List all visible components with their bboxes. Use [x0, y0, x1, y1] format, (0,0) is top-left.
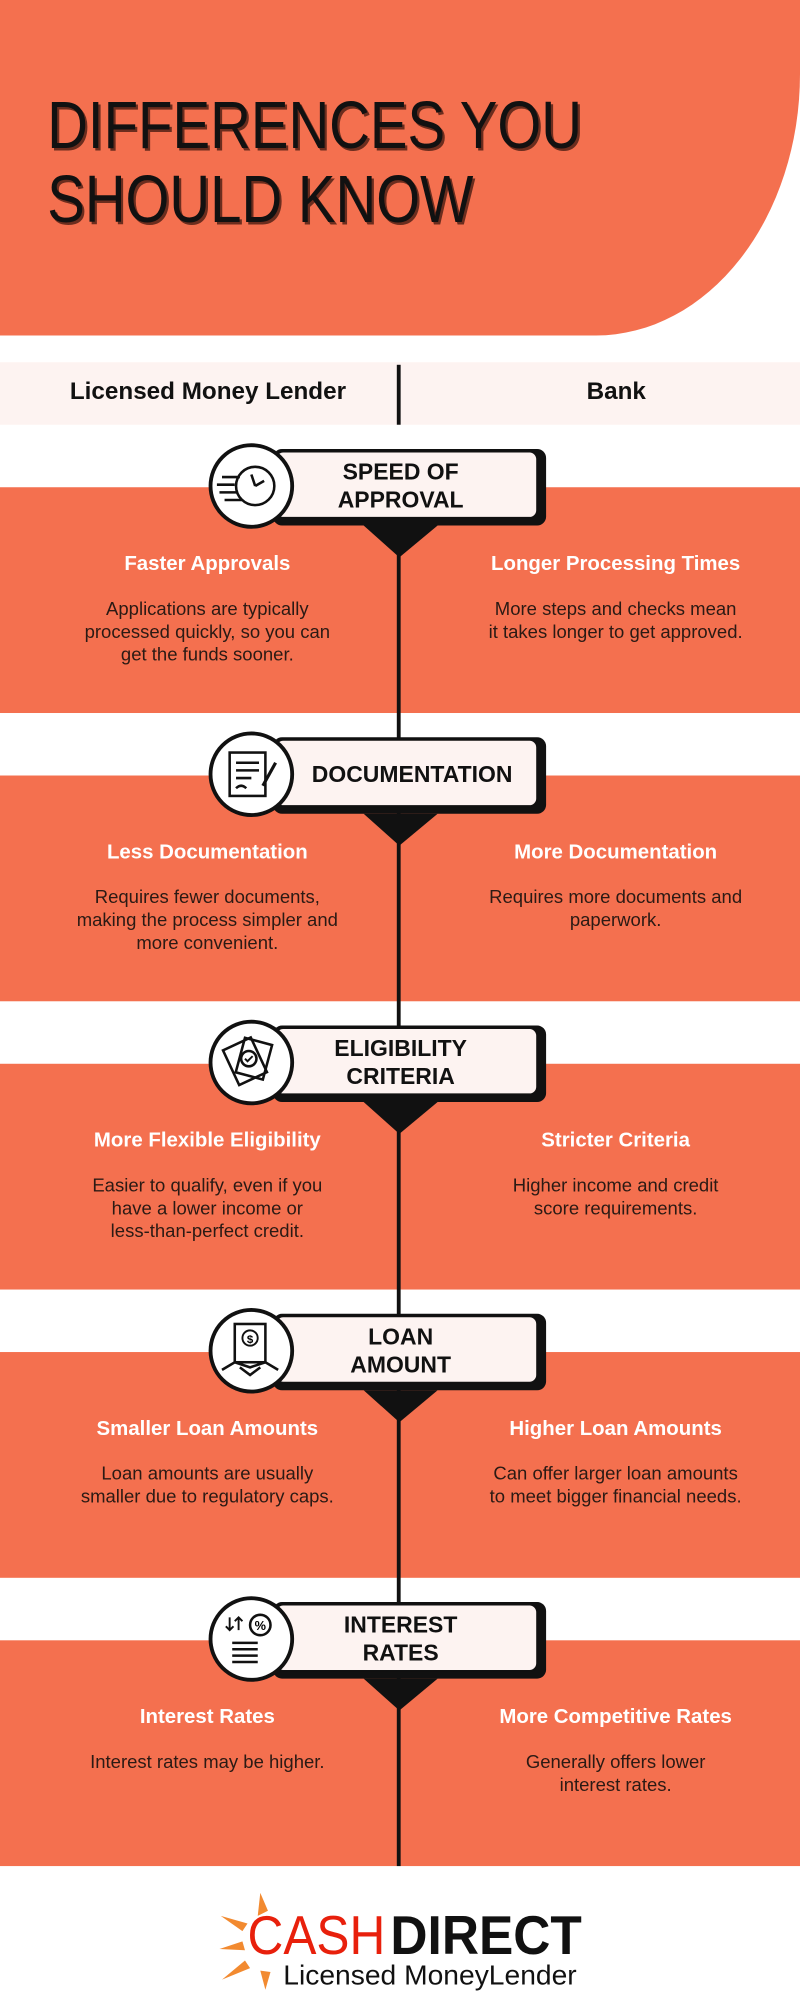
section 3: eligibility criteria: have a lower income or: [112, 1199, 303, 1219]
right: longer processing times: Longer Processing Times: [491, 554, 740, 575]
badge: loan amount: LOAN: [368, 1323, 433, 1349]
center timeline line: [397, 485, 401, 1866]
badge: eligibility criteria: [208, 1020, 546, 1133]
section 4: loan amount: Can offer larger loan amounts: [493, 1464, 738, 1485]
section 3: eligibility criteria: Easier to qualify, even if you: [92, 1176, 322, 1196]
title: DIFFERENCES YOU: [47, 89, 582, 163]
icon: document with handshake: [211, 1310, 292, 1392]
icon: coins with percent: %: [255, 1618, 266, 1633]
right: higher loan amounts: Higher Loan Amounts: [509, 1418, 722, 1440]
badge: interest rates: [208, 1596, 546, 1710]
section 1: speed of approval: get the funds sooner.: [121, 645, 294, 666]
section 2: documentation: more convenient.: [136, 934, 278, 954]
badge: interest rates: INTEREST: [344, 1612, 457, 1638]
section 1: speed of approval: Applications are typically: [106, 599, 309, 620]
left: interest rates: Interest Rates: [140, 1707, 275, 1728]
icon: checked papers: [211, 1022, 292, 1103]
badge: documentation: [208, 732, 546, 845]
section 1: speed of approval: it takes longer to get approved.: [489, 622, 743, 643]
section 2: documentation: paperwork.: [570, 911, 661, 931]
section 2: documentation: making the process simpler and: [77, 911, 338, 931]
header background: [0, 0, 800, 335]
section 5: interest rates: Interest rates may be higher.: [90, 1753, 325, 1773]
badge: speed of approval: SPEED OF: [343, 459, 459, 485]
right: stricter criteria: Stricter Criteria: [541, 1130, 690, 1152]
header: licensed money lender: Licensed Money Lender: [70, 379, 346, 406]
section 4: loan amount: smaller due to regulatory caps.: [81, 1487, 334, 1508]
column headers: [0, 362, 800, 425]
section 5: interest rates: interest rates.: [560, 1776, 672, 1796]
section 3: eligibility criteria: Higher income and credit: [513, 1176, 718, 1196]
badge: interest rates: RATES: [363, 1640, 439, 1666]
section 3: eligibility criteria: score requirements.: [534, 1199, 697, 1219]
logo: cash direct: CASH: [248, 1904, 385, 1966]
badge: eligibility criteria: ELIGIBILITY: [334, 1035, 467, 1061]
section 4: loan amount: Loan amounts are usually: [101, 1464, 313, 1485]
left: more flexible eligibility: More Flexible Eligibility: [94, 1130, 321, 1152]
section 1: speed of approval: processed quickly, so you can: [85, 622, 330, 643]
left: smaller loan amounts: Smaller Loan Amounts: [97, 1418, 318, 1440]
icon: stopwatch: [211, 445, 292, 527]
section 1: speed of approval: [85, 443, 743, 666]
section 3: eligibility criteria: [92, 1020, 718, 1242]
left: faster approvals: Faster Approvals: [124, 554, 290, 575]
section 4: loan amount: to meet bigger financial needs.: [490, 1487, 742, 1508]
section 1: speed of approval: More steps and checks mean: [495, 599, 736, 620]
logo: cash direct: Licensed MoneyLender: [283, 1960, 577, 1991]
section 2: documentation: [77, 732, 742, 954]
badge: speed of approval: [208, 443, 546, 556]
section 2: documentation: Requires fewer documents,: [95, 888, 320, 908]
section 5: interest rates: [90, 1596, 732, 1796]
right: more documentation: More Documentation: [514, 842, 717, 864]
title: [47, 89, 582, 237]
right: more competitive rates: More Competitive Rates: [499, 1707, 732, 1728]
section 5: interest rates: Generally offers lower: [526, 1753, 705, 1773]
badge: loan amount: [208, 1308, 546, 1422]
section 2: documentation: Requires more documents and: [489, 888, 742, 908]
icon: coins with percent: [211, 1598, 292, 1680]
badge: loan amount: AMOUNT: [350, 1351, 451, 1377]
icon: document with handshake: $: [247, 1334, 254, 1346]
icon: sun rays: [219, 1893, 270, 1990]
badge: speed of approval: APPROVAL: [338, 487, 464, 513]
header: bank: Bank: [587, 379, 646, 406]
logo: cash direct: [220, 1893, 582, 1991]
title: SHOULD KNOW: [47, 163, 473, 237]
badge: eligibility criteria: CRITERIA: [346, 1063, 455, 1089]
section 3: eligibility criteria: less-than-perfect credit.: [111, 1222, 304, 1242]
left: less documentation: Less Documentation: [107, 842, 308, 864]
icon: document: [211, 733, 292, 815]
section 4: loan amount: [81, 1308, 742, 1508]
badge: documentation: DOCUMENTATION: [312, 761, 512, 787]
